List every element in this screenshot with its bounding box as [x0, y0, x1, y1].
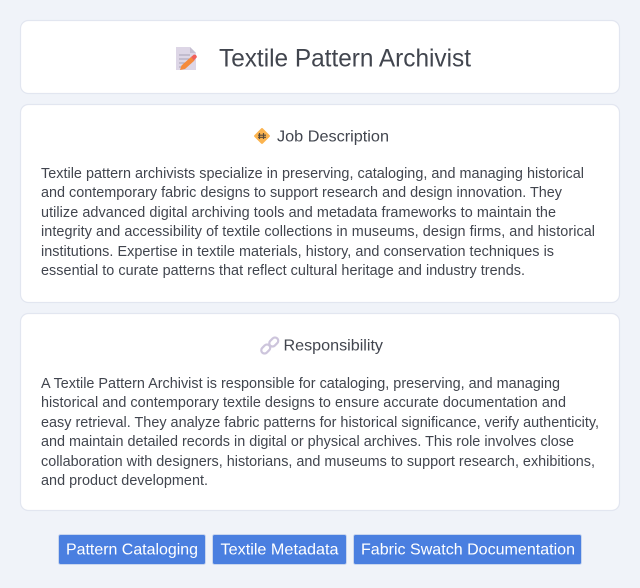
heading: responsibility: Responsibility — [284, 338, 383, 354]
text block: responsibility: and product development. — [41, 473, 208, 489]
text block: responsibility: easy retrieval. They analyze fabric patterns for historical significance, verify authenticity, — [41, 415, 599, 431]
icon: document with pencil — [176, 47, 197, 70]
text block: responsibility — [41, 376, 599, 489]
tag: textile metadata — [212, 534, 346, 564]
text block: job description: Textile pattern archivists specialize in preserving, cataloging, and managing historical — [41, 166, 584, 182]
title: Textile Pattern Archivist — [219, 44, 471, 72]
panel: job description — [20, 104, 620, 302]
heading: job description: Job Description — [277, 128, 389, 146]
text block: responsibility: collaboration with designers, historians, and museums to support research, exhibitions, — [41, 454, 595, 470]
text block: job description: integrity and accessibility of textile collections in museums, design firms, and historical — [41, 224, 595, 240]
panel: header — [20, 20, 620, 94]
text block: job description: essential to curate patterns that reflect cultural heritage and industry trends. — [41, 263, 525, 279]
text block: responsibility: and maintain detailed records in digital or physical archives. This role involves close — [41, 434, 574, 450]
icon: orange diamond — [254, 128, 270, 144]
text block: responsibility: A Textile Pattern Archivist is responsible for cataloging, preserving, and managing — [41, 376, 560, 392]
text block: job description: utilize advanced digital archiving tools and metadata frameworks to maintain the — [41, 205, 556, 221]
tag: pattern cataloging: Pattern Cataloging — [66, 542, 198, 558]
icon: chain link — [260, 336, 280, 355]
tag: fabric swatch documentation — [354, 534, 582, 564]
text block: responsibility: historical and contemporary textile designs to ensure accurate documentation and — [41, 395, 566, 411]
panel: responsibility — [20, 314, 620, 510]
text block: job description — [41, 166, 595, 279]
text block: job description: and contemporary fabric designs to support research and design innovation. They — [41, 185, 563, 201]
tag: pattern cataloging — [58, 534, 206, 564]
text block: job description: institutions. Expertise in textile materials, history, and conservation techniques is — [41, 244, 554, 260]
tag: textile metadata: Textile Metadata — [220, 542, 339, 558]
tag: fabric swatch documentation: Fabric Swatch Documentation — [361, 542, 575, 558]
